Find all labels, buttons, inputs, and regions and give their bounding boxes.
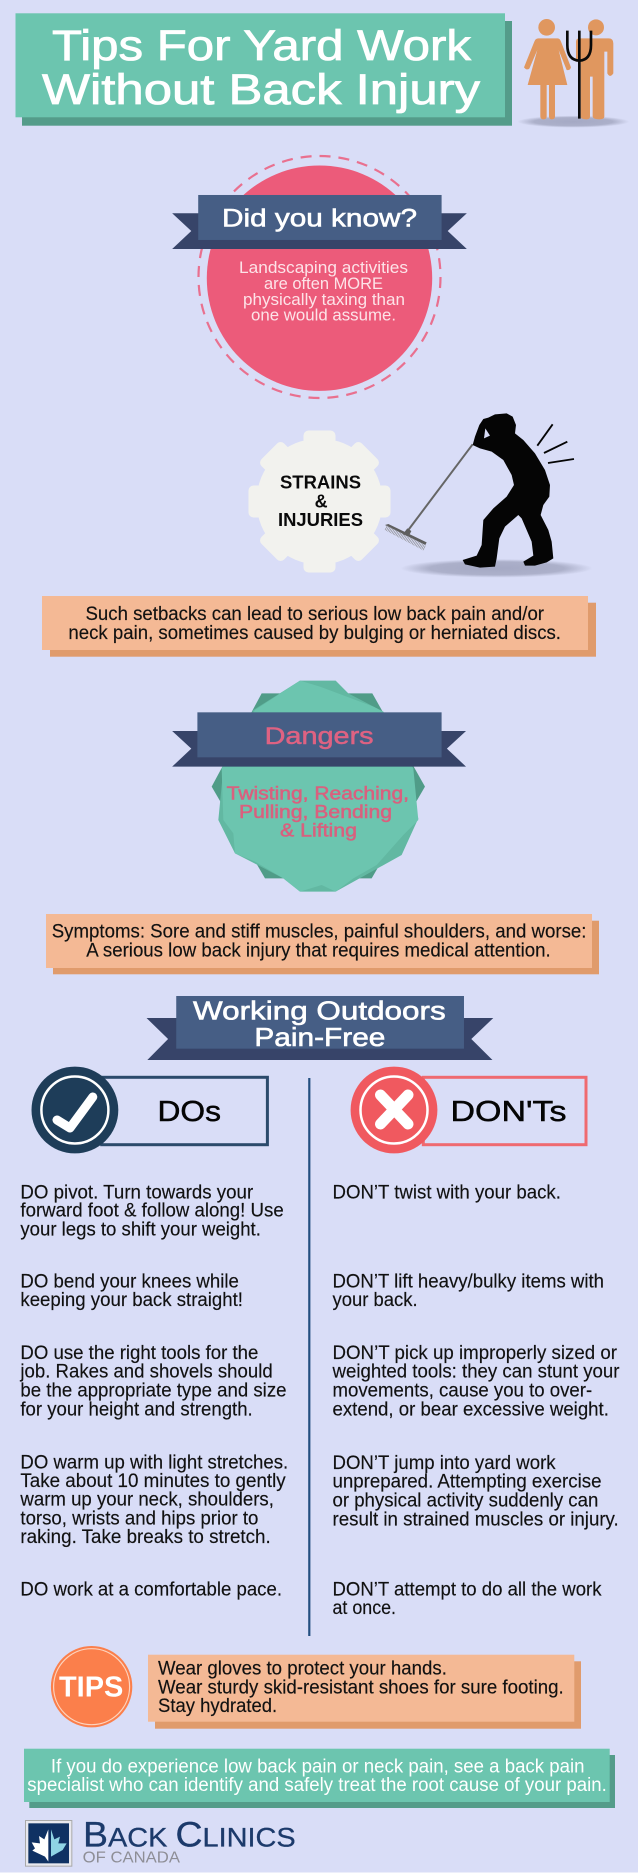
list: DON'Ts: your back. (332, 1290, 418, 1311)
list: DON'Ts: movements, cause you to over- (332, 1381, 592, 1402)
list: DON'Ts (332, 1182, 620, 1619)
header: DOs: DOs (158, 1096, 221, 1128)
list: DON'Ts: or physical activity suddenly can (332, 1491, 598, 1512)
list: DOs: job. Rakes and shovels should (19, 1362, 273, 1383)
list: DON'Ts: DON’T attempt to do all the work (332, 1579, 602, 1600)
badge: tips (51, 1646, 132, 1727)
text: dangers list: Twisting, Reaching, (227, 783, 409, 803)
callout: see a specialist (24, 1749, 615, 1808)
list: DON'Ts: DON’T pick up improperly sized or (332, 1343, 618, 1364)
callout: see a specialist: specialist who can identify and safely treat the root cause of your pain. (27, 1775, 607, 1796)
ribbon: dangers (172, 712, 466, 767)
callout: see a specialist: If you do experience low back pain or neck pain, see a back pain (51, 1756, 584, 1777)
list: DOs: DO pivot. Turn towards your (20, 1182, 254, 1203)
callout: setbacks (42, 596, 596, 657)
callout: setbacks: neck pain, sometimes caused by bulging or herniated discs. (68, 623, 561, 644)
ribbon: working outdoors: Working Outdoors (193, 995, 446, 1025)
badge: dangers (212, 681, 425, 892)
list: DON'Ts: DON’T twist with your back. (332, 1182, 561, 1203)
list: DON'Ts: at once. (332, 1598, 396, 1619)
header: DON'Ts (351, 1067, 586, 1153)
list: DOs: torso, wrists and hips prior to (20, 1508, 258, 1529)
callout: symptoms: A serious low back injury that requires medical attention. (86, 940, 551, 961)
ribbon: working outdoors: Pain-Free (254, 1022, 385, 1052)
header: DOs (32, 1067, 267, 1153)
list: DOs: DO warm up with light stretches. (20, 1452, 288, 1473)
icon: man with rake holding back (385, 413, 593, 578)
gear: strains and injuries: STRAINS (280, 471, 361, 492)
title banner: Without Back Injury (42, 66, 481, 114)
logo: back clinics of canada: OF CANADA (83, 1850, 181, 1867)
list: DON'Ts: unprepared. Attempting exercise (332, 1472, 602, 1493)
title banner (16, 13, 512, 126)
list: DOs: raking. Take breaks to stretch. (20, 1527, 271, 1548)
text: landscaping fact: Landscaping activities (239, 259, 408, 277)
gear: strains and injuries: INJURIES (278, 509, 363, 530)
text: landscaping fact: are often MORE (264, 275, 383, 293)
text: landscaping fact (239, 259, 408, 324)
logo: back clinics of canada: BACK CLINICS (83, 1816, 296, 1855)
list: DOs: DO use the right tools for the (20, 1343, 258, 1364)
header: DON'Ts: DON'Ts (450, 1096, 566, 1128)
icon: couple with pitchfork (517, 19, 629, 128)
list: DON'Ts: weighted tools: they can stunt your (332, 1362, 620, 1383)
ribbon: working outdoors (147, 995, 493, 1060)
column divider (308, 1078, 310, 1636)
list: DOs: DO bend your knees while (20, 1271, 239, 1292)
list: DON'Ts: DON’T lift heavy/bulky items with (332, 1271, 604, 1292)
list: DON'Ts: result in strained muscles or injury. (332, 1509, 619, 1530)
ribbon: did you know: Did you know? (222, 205, 417, 233)
list: DOs: your legs to shift your weight. (20, 1220, 261, 1241)
ribbon: dangers: Dangers (265, 723, 374, 750)
list: DOs: warm up your neck, shoulders, (19, 1490, 274, 1511)
callout: tips (148, 1655, 581, 1729)
list: DOs: for your height and strength. (20, 1399, 253, 1420)
text: landscaping fact: physically taxing than (243, 291, 405, 309)
logo: back clinics of canada (25, 1816, 296, 1867)
list: DOs: DO work at a comfortable pace. (20, 1579, 282, 1600)
list: DOs: be the appropriate type and size (20, 1381, 287, 1402)
callout: tips: Wear sturdy skid-resistant shoes for sure footing. (158, 1677, 564, 1698)
text: dangers list (227, 783, 409, 841)
ribbon: did you know (172, 195, 467, 249)
callout: setbacks: Such setbacks can lead to serious low back pain and/or (86, 604, 545, 625)
text: dangers list: Pulling, Bending (239, 802, 392, 822)
callout: symptoms: Symptoms: Sore and stiff muscles, painful shoulders, and worse: (52, 922, 586, 943)
did you know circle (198, 156, 440, 398)
title banner: Tips For Yard Work (52, 22, 472, 70)
text: landscaping fact: one would assume. (251, 306, 396, 324)
list: DOs: keeping your back straight! (20, 1290, 243, 1311)
gear: strains and injuries: & (315, 491, 328, 512)
callout: symptoms (46, 914, 599, 974)
callout: tips: Stay hydrated. (158, 1696, 277, 1717)
list: DON'Ts: extend, or bear excessive weight. (332, 1399, 609, 1420)
callout: tips: Wear gloves to protect your hands. (158, 1658, 447, 1679)
list: DOs: Take about 10 minutes to gently (20, 1471, 286, 1492)
list: DOs: forward foot & follow along! Use (20, 1201, 284, 1222)
text: dangers list: & Lifting (280, 821, 357, 841)
badge: tips: TIPS (59, 1672, 123, 1704)
list: DON'Ts: DON’T jump into yard work (332, 1453, 556, 1474)
list: DOs (19, 1182, 288, 1600)
gear: strains and injuries (248, 430, 390, 572)
